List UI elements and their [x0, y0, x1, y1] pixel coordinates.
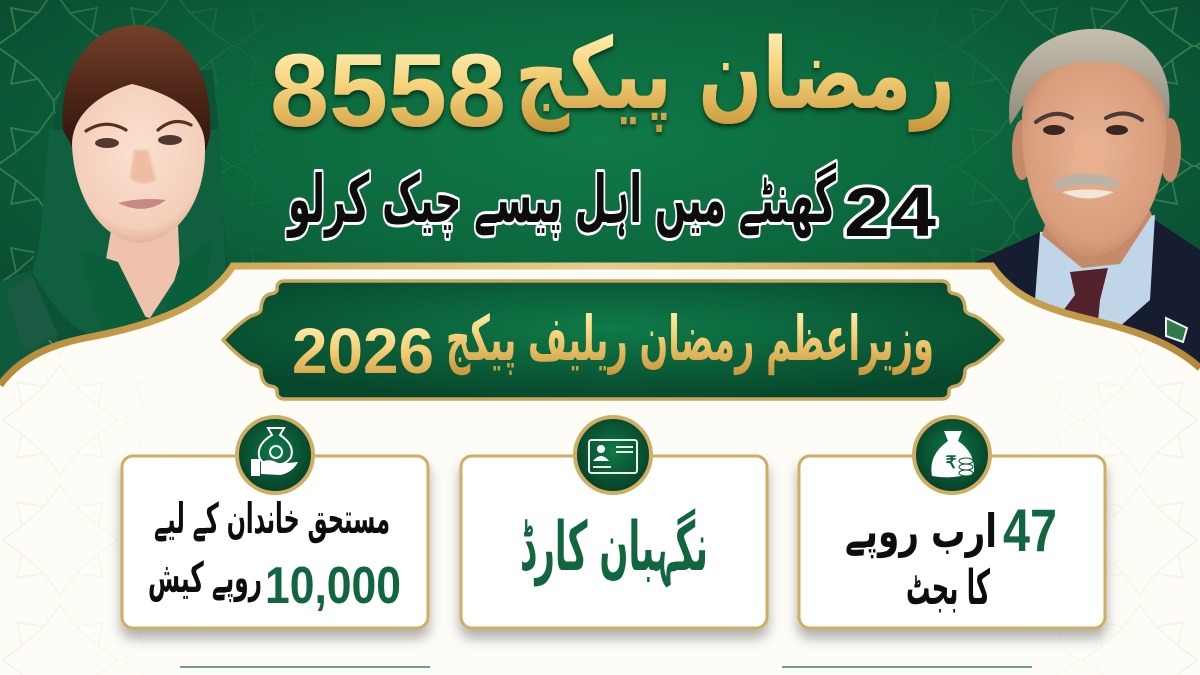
card 3 text line 2: کا بجٹ	[906, 560, 990, 616]
card 3 text line 1: ارب روپے	[845, 504, 997, 559]
icon: hand with money bag	[237, 417, 313, 493]
icon: id card	[575, 417, 651, 493]
card 3 number: 47	[1003, 497, 1057, 564]
icon: money bag and coins: ₹	[946, 453, 957, 472]
portrait: man	[975, 29, 1200, 400]
card 2: nigehban card	[461, 417, 767, 628]
card 2 text: نگہبان کارڈ	[520, 508, 708, 588]
title number: 8558	[270, 33, 506, 149]
title urdu: رمضان پیکج	[515, 18, 955, 132]
bottom line left	[180, 666, 430, 668]
card 1 amount: 10,000	[265, 557, 401, 615]
title	[270, 18, 955, 149]
card 1 text line 2: روپے کیش	[148, 553, 262, 603]
bottom line right	[782, 666, 1032, 668]
background pattern right	[954, 0, 1200, 262]
ribbon year: 2026	[292, 315, 434, 387]
icon: money bag and coins	[914, 417, 990, 493]
white lower panel	[0, 266, 1200, 675]
ribbon banner	[223, 281, 1003, 399]
green background	[0, 0, 1200, 400]
subtitle	[286, 161, 936, 251]
card 1: cash	[122, 417, 428, 628]
portrait: woman	[0, 25, 240, 400]
card 1 text line 1: مستحق خاندان کے لیے	[154, 494, 390, 544]
subtitle number: 24	[844, 173, 936, 251]
card 3: budget	[799, 417, 1105, 628]
background pattern left	[0, 0, 247, 282]
